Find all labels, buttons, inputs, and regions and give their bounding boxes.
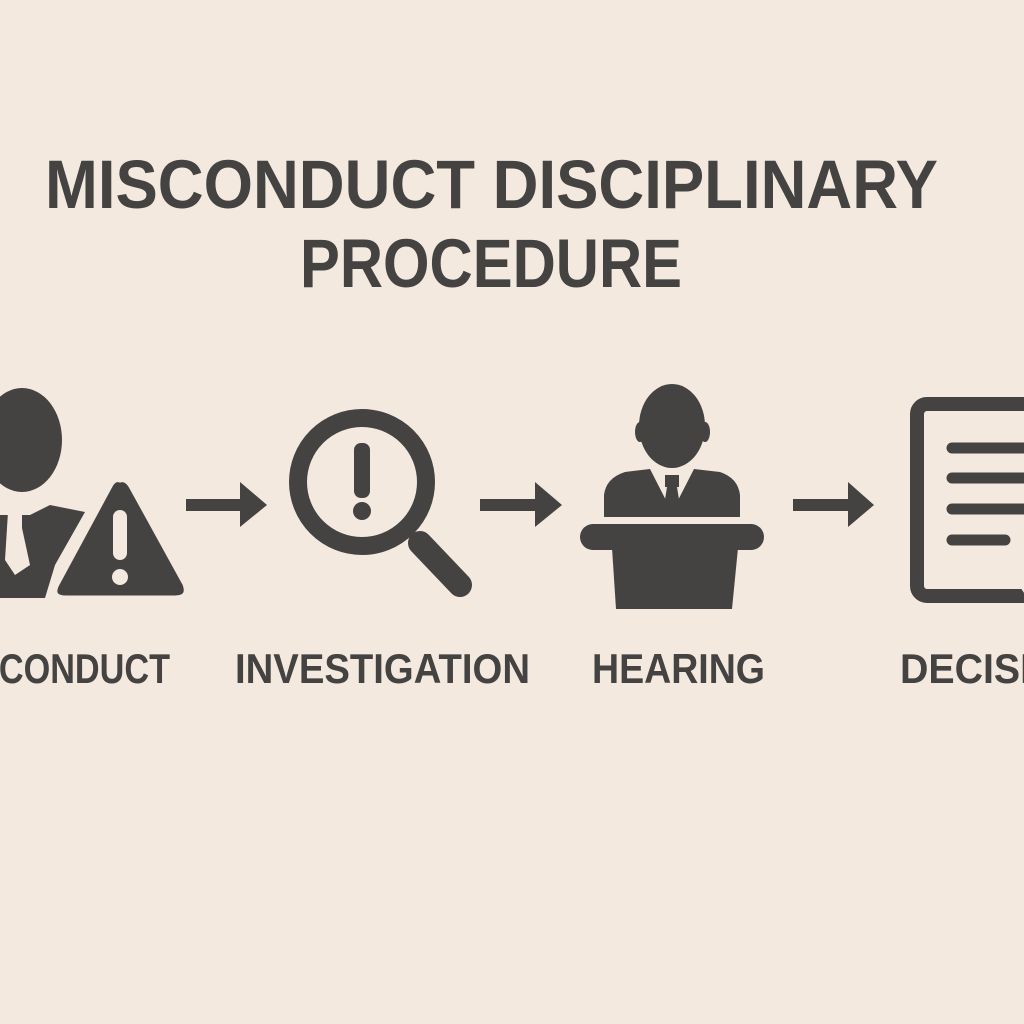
icon: decision document	[917, 404, 1024, 598]
arrow 3	[793, 482, 874, 527]
title: MISCONDUCT DISCIPLINARY	[45, 146, 938, 223]
label: investigation: INVESTIGATION	[235, 645, 530, 692]
label: hearing: HEARING	[592, 645, 765, 692]
icon: hearing speaker at lectern	[580, 384, 764, 609]
arrow 1	[186, 482, 267, 527]
icon: magnifier	[298, 418, 460, 585]
title	[45, 146, 938, 302]
icon: person with warning	[0, 388, 186, 598]
title: PROCEDURE	[300, 225, 682, 302]
arrow 2	[480, 482, 562, 527]
